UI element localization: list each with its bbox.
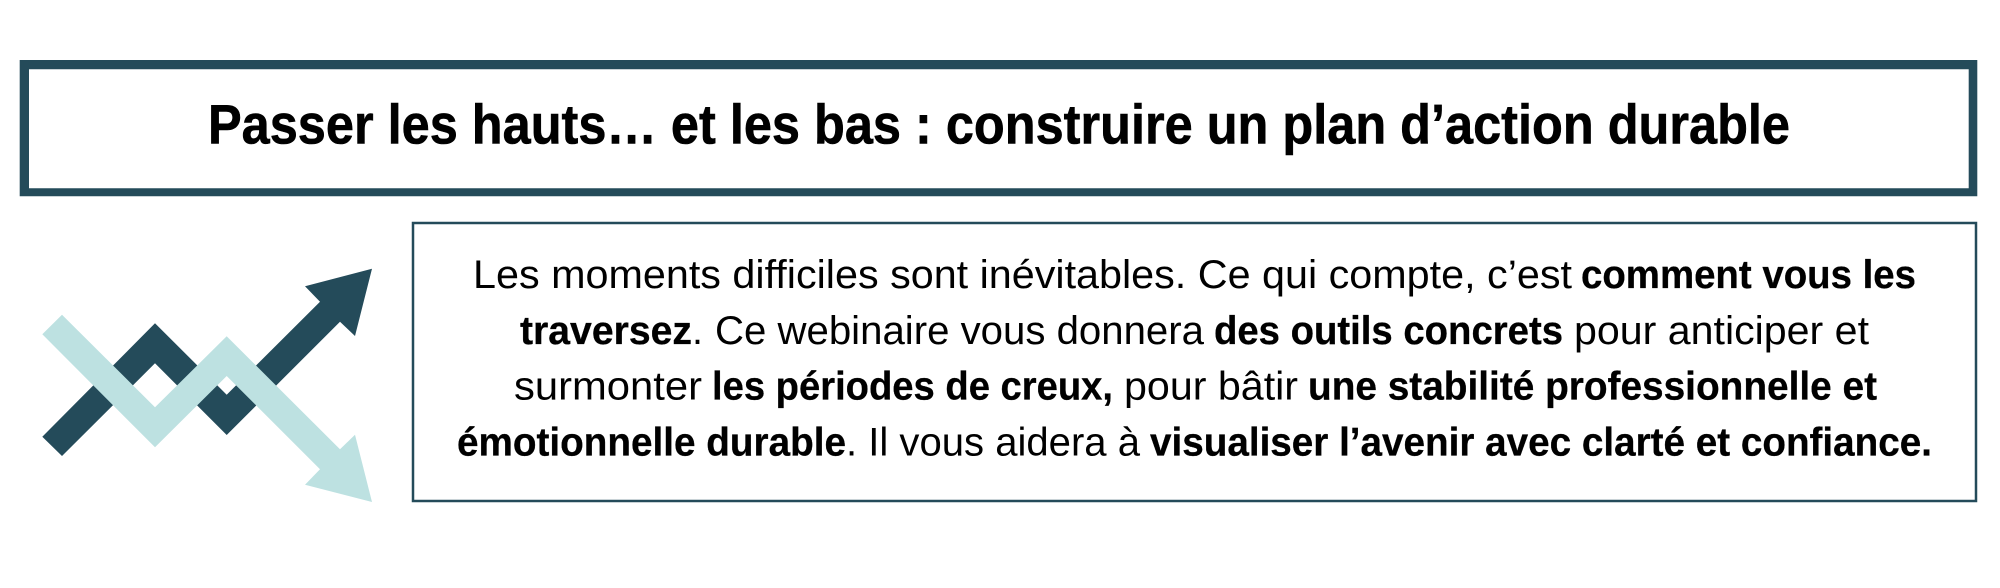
icon: dark rising arrow [42,269,372,456]
text line 2 [520,309,1869,353]
panel: description [413,223,1976,501]
text line 2: . [692,309,703,353]
text line 3: une stabilité professionnelle et [1308,364,1877,408]
text line 3: les périodes de creux, [712,364,1113,408]
text line 4: visualiser l’avenir avec clarté et confiance. [1150,420,1932,464]
icon: crossing up and down zigzag arrows [42,269,372,502]
text line 4: émotionnelle durable [457,420,846,464]
title panel [20,60,1977,196]
text line 3: pour bâtir [1124,364,1298,408]
text line 3: surmonter [514,364,702,408]
text line 2: Ce webinaire vous donnera [715,309,1205,353]
text line 2: pour anticiper et [1574,309,1869,353]
icon: light falling arrow [42,315,372,502]
text line 3 [514,364,1877,408]
text line 1: comment vous les [1581,253,1916,297]
text line 2: traversez [520,309,692,353]
text line 1: Les moments difficiles sont inévitables. Ce qui compte, c’est [473,253,1572,297]
text line 4 [457,420,1932,464]
text line 4: . Il vous aidera à [846,420,1141,464]
text line 2: des outils concrets [1214,309,1563,353]
title: Passer les hauts… et les bas : construire un plan d’action durable [208,92,1790,156]
